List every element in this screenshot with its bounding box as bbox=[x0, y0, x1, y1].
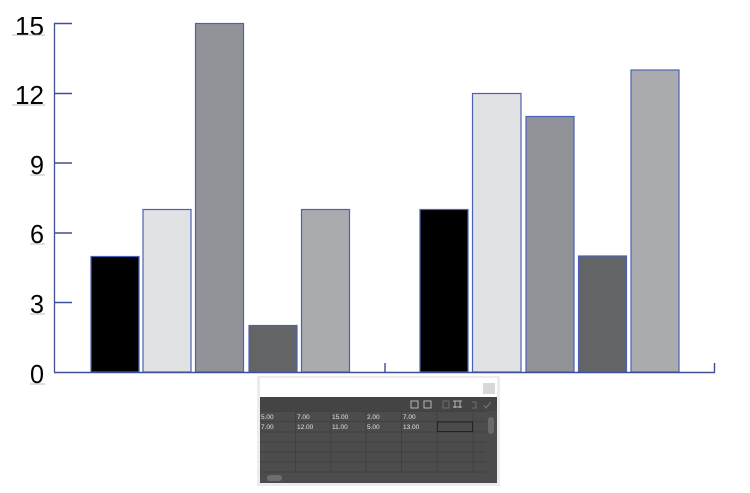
table values: 5.00 bbox=[367, 424, 380, 431]
table values: 5.00 bbox=[261, 414, 274, 421]
panel shadow bbox=[257, 376, 500, 486]
toolbar icons bbox=[411, 401, 491, 408]
y axis labels: 12 bbox=[15, 80, 44, 110]
table values: 7.00 bbox=[297, 414, 310, 421]
table values: 2.00 bbox=[367, 414, 380, 421]
table grid bbox=[260, 411, 486, 472]
table values bbox=[261, 414, 420, 431]
second group of bars bbox=[420, 70, 679, 372]
vertical scrollbar bbox=[488, 417, 494, 434]
x axis with ticks bbox=[54, 363, 715, 372]
table values: 12.00 bbox=[297, 424, 314, 431]
data panel bbox=[257, 376, 500, 486]
table values: 15.00 bbox=[332, 414, 349, 421]
y axis labels: 0 bbox=[30, 359, 44, 389]
table values: 7.00 bbox=[261, 424, 274, 431]
panel header bbox=[260, 378, 497, 397]
y axis labels bbox=[12, 11, 45, 389]
y axis labels: 6 bbox=[30, 219, 44, 249]
y axis with ticks bbox=[54, 23, 72, 372]
table values: 11.00 bbox=[332, 424, 348, 431]
y axis labels: 3 bbox=[30, 289, 44, 319]
table values: 7.00 bbox=[403, 414, 416, 421]
selected cell bbox=[438, 422, 472, 432]
y axis labels: 15 bbox=[15, 11, 44, 41]
panel body bbox=[260, 397, 497, 483]
table values: 13.00 bbox=[403, 424, 420, 431]
horizontal scrollbar bbox=[267, 475, 282, 481]
y axis labels: 9 bbox=[30, 150, 44, 180]
first group of bars bbox=[91, 24, 350, 372]
